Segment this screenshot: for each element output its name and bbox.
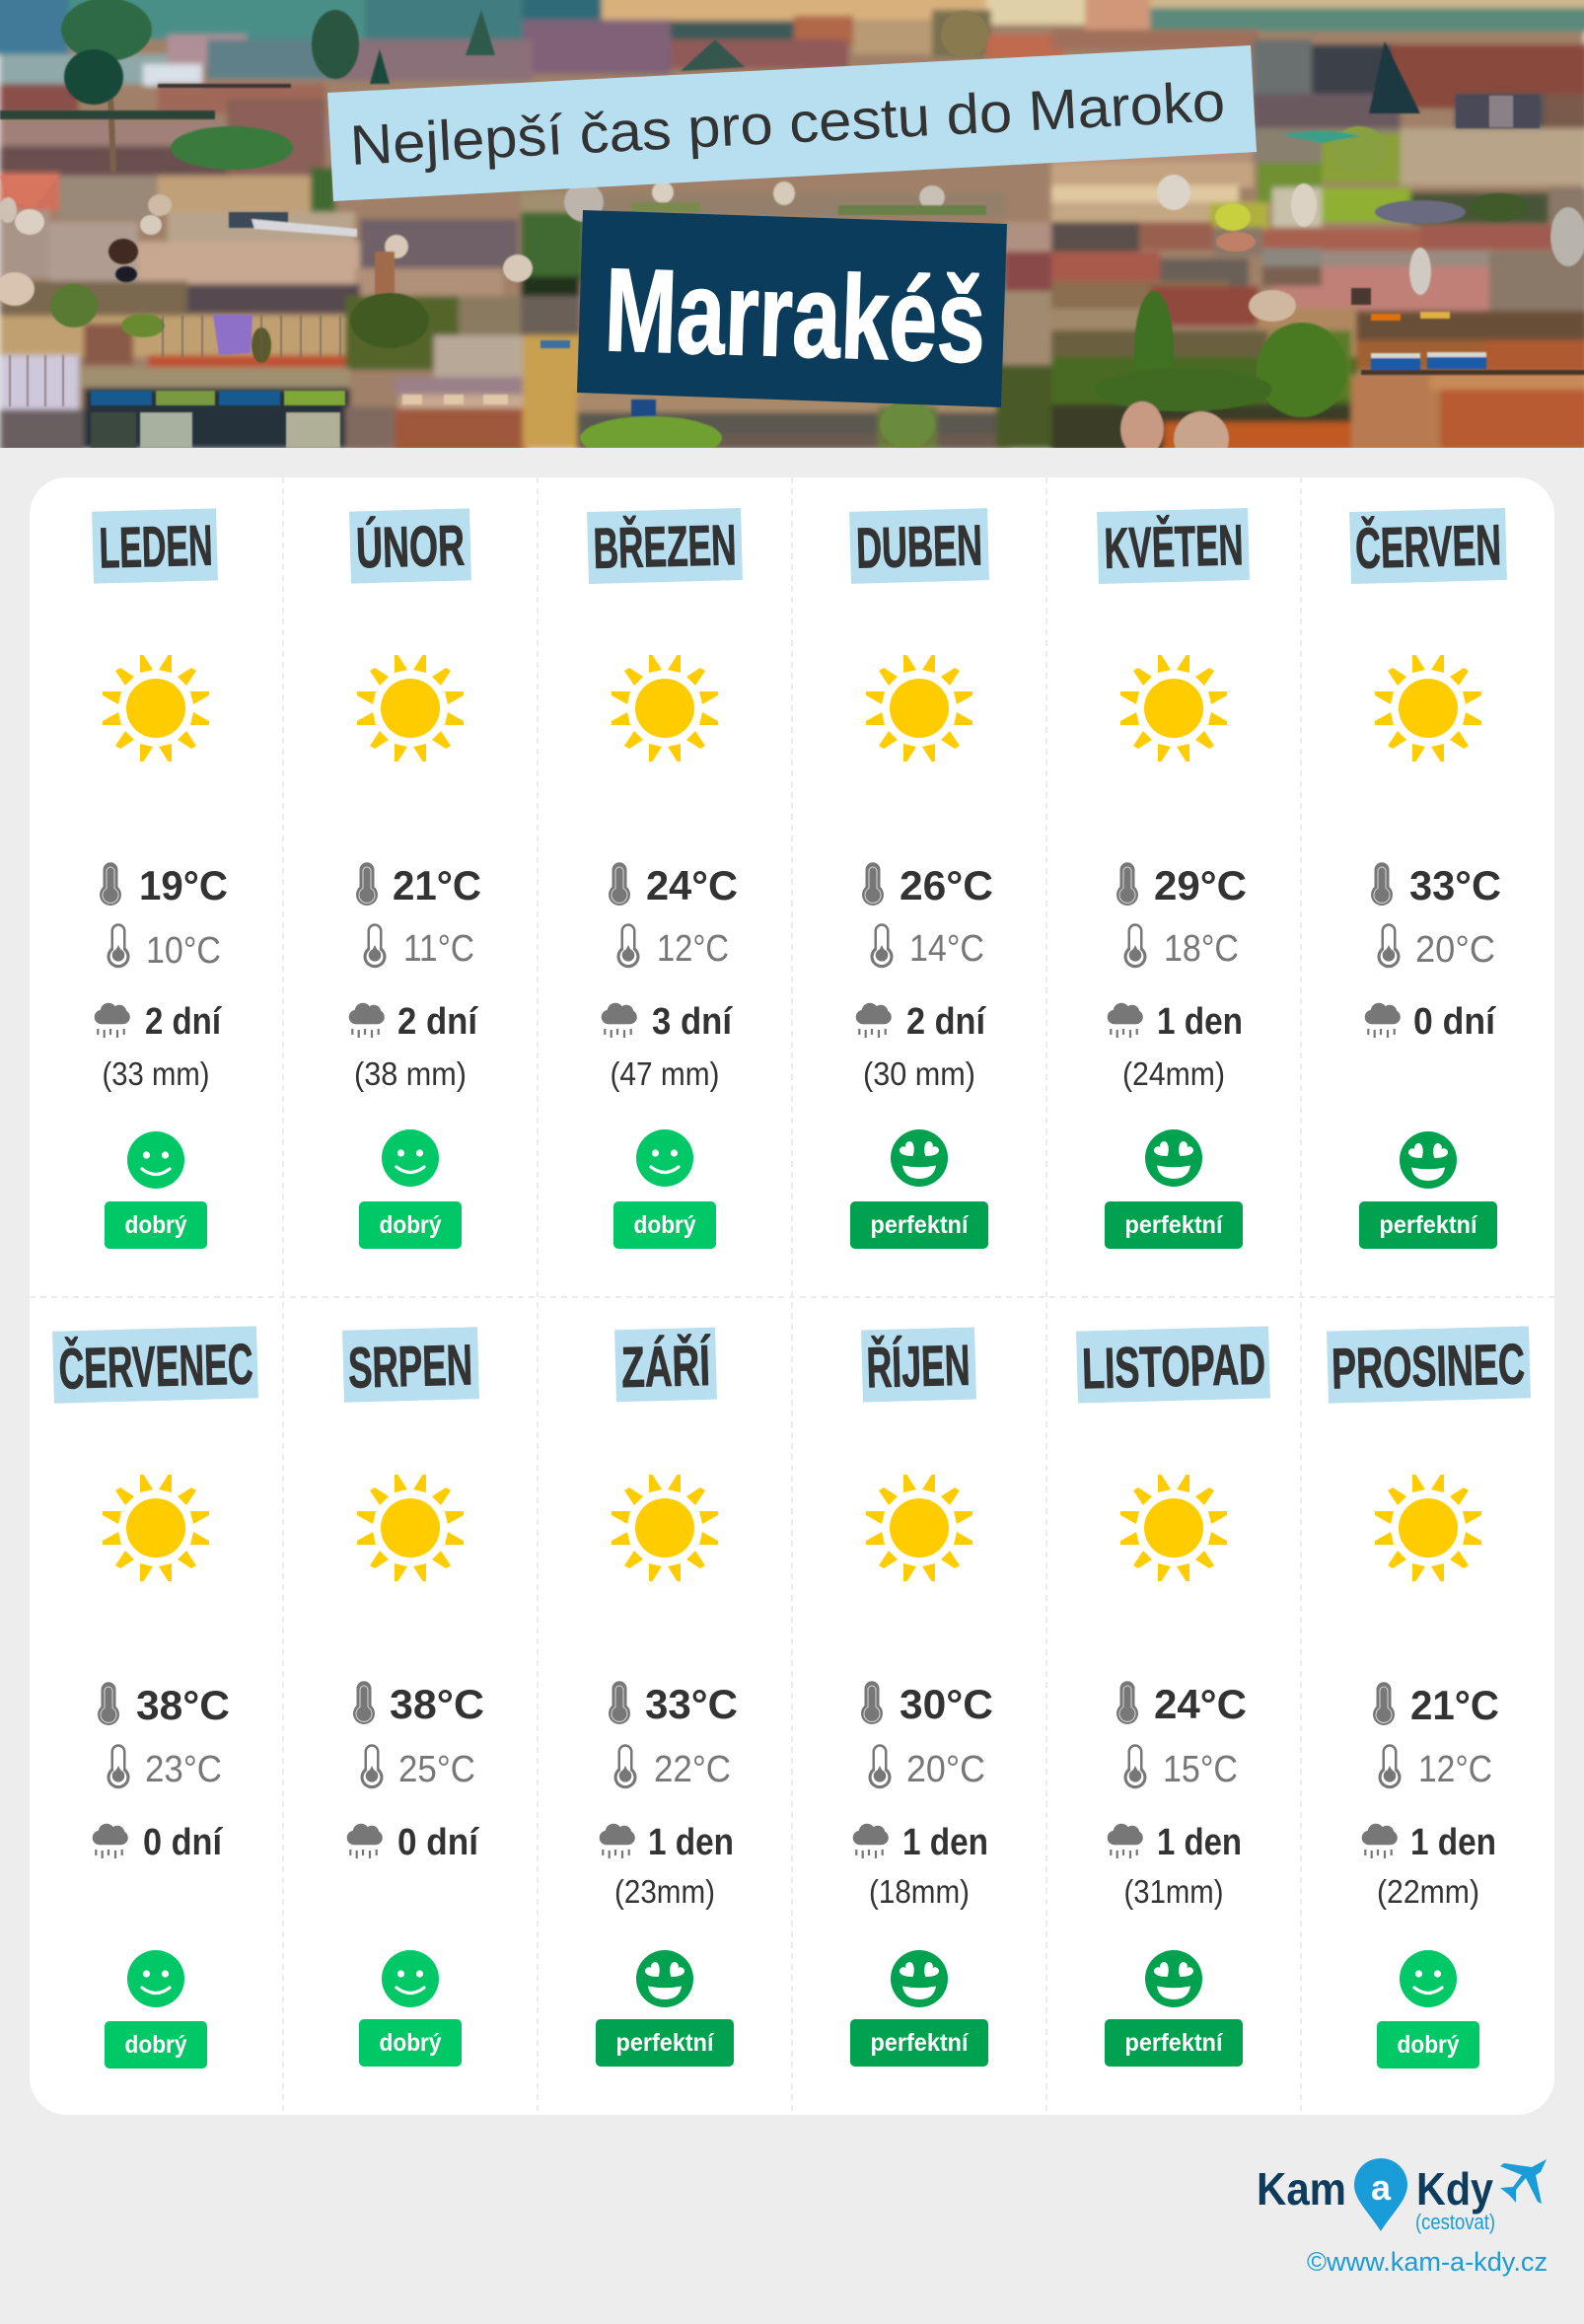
panel: Říjen — [850, 1327, 993, 2067]
rain days: 0 dní — [397, 1822, 479, 1863]
icon: max thermometer — [98, 1682, 119, 1725]
heading: Říjen — [861, 1327, 976, 1402]
panel: Prosinec — [1327, 1326, 1531, 2069]
heading: Březen — [587, 508, 743, 584]
heading: Září: ZÁŘÍ — [620, 1334, 712, 1400]
panel: Březen — [587, 508, 743, 1249]
icon: rain cloud — [95, 1003, 130, 1038]
icon: heart-eyes smiley — [891, 1129, 948, 1187]
max temperature: 19°C — [139, 862, 228, 908]
city heading: Marrakéš: Marrakéš — [603, 244, 987, 388]
icon: max thermometer — [356, 862, 378, 906]
precipitation: (18mm) — [869, 1873, 970, 1910]
icon: sun — [1375, 655, 1481, 762]
heading: Červen — [1349, 508, 1507, 584]
rating badge — [596, 2019, 734, 2067]
icon: smiley — [382, 1129, 439, 1187]
icon: min thermometer — [613, 1744, 637, 1788]
rain days: 1 den — [648, 1822, 734, 1863]
rating badge: dobrý — [379, 2029, 442, 2057]
icon: rain cloud — [600, 1824, 635, 1858]
rating badge — [1359, 1201, 1497, 1249]
precipitation: (31mm) — [1124, 1873, 1223, 1910]
logo: Kam a Kdy: Kam — [1257, 2163, 1346, 2215]
rain days: 1 den — [902, 1822, 988, 1863]
icon: min thermometer — [361, 1744, 383, 1788]
icon: min thermometer — [617, 923, 639, 968]
panel: Květen — [1097, 508, 1250, 1249]
city heading: Marrakéš — [577, 210, 1007, 407]
logo: Kam a Kdy: Kdy — [1416, 2163, 1493, 2215]
max temperature: 24°C — [1154, 1681, 1247, 1727]
website url: ©www.kam-a-kdy.cz — [1307, 2247, 1548, 2277]
icon: rain cloud — [1108, 1824, 1143, 1858]
icon: sun — [612, 1475, 718, 1581]
rating badge — [613, 1201, 716, 1249]
heading: Duben: DUBEN — [855, 513, 983, 581]
icon: min thermometer — [868, 1744, 892, 1788]
icon: rain cloud — [602, 1003, 637, 1038]
min temperature: 18°C — [1164, 928, 1239, 970]
title banner — [327, 45, 1257, 201]
icon: location pin: a — [1371, 2167, 1392, 2208]
icon: sun — [357, 655, 464, 762]
icon: sun — [103, 655, 209, 762]
rain days: 3 dní — [652, 1001, 733, 1043]
heading: Srpen: SRPEN — [347, 1333, 473, 1401]
min temperature: 12°C — [657, 928, 729, 970]
icon: heart-eyes smiley — [1400, 1131, 1457, 1189]
icon: heart-eyes smiley — [1145, 1950, 1202, 2007]
icon: sun — [1120, 1475, 1227, 1581]
min temperature: 20°C — [906, 1749, 985, 1790]
icon: rain cloud — [1108, 1003, 1143, 1038]
rain days: 2 dní — [906, 1001, 986, 1043]
hero photo: Marrakech rooftops — [0, 0, 1584, 467]
precipitation: (38 mm) — [354, 1055, 467, 1092]
panel: Listopad — [1076, 1326, 1270, 2067]
rating badge: dobrý — [379, 1211, 442, 1239]
precipitation: (23mm) — [614, 1873, 715, 1910]
max temperature: 21°C — [393, 862, 481, 908]
panel: Červenec — [52, 1326, 258, 2069]
icon: location pin — [1354, 2158, 1407, 2231]
max temperature: 30°C — [900, 1681, 993, 1727]
icon: max thermometer — [1116, 862, 1138, 906]
rain days: 2 dní — [397, 1001, 478, 1043]
heading: Březen: BŘEZEN — [593, 513, 737, 581]
max temperature: 38°C — [136, 1682, 230, 1728]
icon: heart-eyes smiley — [891, 1950, 948, 2007]
icon: max thermometer — [1116, 1681, 1138, 1724]
heading: Leden: LEDEN — [99, 514, 213, 580]
max temperature: 21°C — [1410, 1682, 1499, 1728]
max temperature: 26°C — [900, 862, 993, 908]
icon: max thermometer — [609, 862, 630, 906]
heading: Říjen: ŘÍJEN — [866, 1334, 971, 1400]
icon: max thermometer — [609, 1681, 630, 1724]
icon: rain cloud — [1365, 1003, 1401, 1038]
rating badge — [1105, 1201, 1243, 1249]
heading: Duben — [849, 508, 989, 584]
min temperature: 25°C — [398, 1749, 475, 1790]
rain days: 1 den — [1157, 1001, 1243, 1043]
min temperature: 20°C — [1415, 929, 1495, 971]
icon: max thermometer — [861, 1681, 883, 1724]
max temperature: 38°C — [390, 1681, 484, 1727]
icon: sun — [866, 1475, 972, 1581]
rating badge: dobrý — [633, 1211, 696, 1239]
rain days: 0 dní — [1413, 1001, 1496, 1043]
rating badge — [850, 1201, 988, 1249]
icon: min thermometer — [107, 923, 130, 968]
rating badge: perfektní — [1124, 1211, 1223, 1239]
precipitation: (22mm) — [1377, 1873, 1479, 1910]
rating badge — [105, 2021, 207, 2069]
min temperature: 15°C — [1163, 1749, 1238, 1790]
icon: sun — [103, 1475, 209, 1581]
precipitation: (24mm) — [1122, 1055, 1225, 1092]
heading: Září — [614, 1328, 717, 1402]
rating badge — [850, 2019, 988, 2067]
icon: min thermometer — [107, 1744, 130, 1788]
icon: heart-eyes smiley — [1145, 1129, 1202, 1187]
icon: smiley — [382, 1950, 439, 2007]
rating badge — [359, 2019, 462, 2067]
rating badge — [105, 1201, 207, 1249]
heading: Červenec — [52, 1326, 258, 1404]
icon: min thermometer — [1124, 1744, 1146, 1788]
heading: Srpen — [342, 1327, 479, 1403]
min temperature: 23°C — [145, 1749, 222, 1790]
panel: Leden — [92, 508, 228, 1249]
rating badge: dobrý — [124, 2031, 187, 2059]
max temperature: 33°C — [1409, 862, 1501, 908]
heading: Únor — [349, 508, 471, 584]
heading: Únor: ÚNOR — [355, 514, 466, 580]
max temperature: 33°C — [645, 1681, 738, 1727]
icon: min thermometer — [1124, 923, 1146, 968]
rain days: 2 dní — [145, 1001, 222, 1043]
panel: Únor — [349, 508, 481, 1249]
icon: rain cloud — [1362, 1824, 1398, 1858]
icon: smiley — [636, 1129, 693, 1187]
logo: Kam a Kdy: (cestovat) — [1415, 2210, 1495, 2234]
icon: max thermometer — [1371, 862, 1393, 906]
panel: Duben — [849, 508, 993, 1249]
icon: airplane — [1500, 2159, 1547, 2204]
panel: Červen — [1349, 508, 1507, 1249]
rating badge: perfektní — [615, 2029, 714, 2057]
heading: Listopad: LISTOPAD — [1081, 1333, 1266, 1401]
min temperature: 10°C — [146, 930, 221, 972]
icon: max thermometer — [353, 1681, 375, 1724]
min temperature: 22°C — [654, 1749, 731, 1790]
precipitation: (30 mm) — [863, 1055, 975, 1092]
rating badge — [1105, 2019, 1243, 2067]
precipitation: (33 mm) — [103, 1055, 209, 1092]
rain days: 1 den — [1410, 1822, 1496, 1863]
heading: Květen: KVĚTEN — [1104, 513, 1244, 581]
icon: min thermometer — [1377, 923, 1401, 968]
title banner: Nejlepší čas pro cestu do Maroko — [348, 70, 1227, 178]
icon: sun — [1375, 1475, 1481, 1581]
icon: sun — [866, 655, 972, 762]
icon: max thermometer — [100, 862, 121, 906]
icon: rain cloud — [93, 1824, 128, 1858]
panel: Září — [596, 1328, 738, 2067]
rating badge: dobrý — [124, 1211, 187, 1239]
icon: max thermometer — [1373, 1682, 1395, 1725]
palm — [108, 39, 113, 173]
logo: Kam a Kdy — [1257, 2158, 1547, 2234]
icon: smiley — [1400, 1950, 1457, 2007]
icon: rain cloud — [853, 1824, 889, 1858]
icon: min thermometer — [870, 923, 894, 968]
rating badge: perfektní — [870, 2029, 969, 2057]
max temperature: 29°C — [1154, 862, 1247, 908]
icon: sun — [612, 655, 718, 762]
rating badge: perfektní — [870, 1211, 969, 1239]
icon: smiley — [127, 1131, 184, 1189]
icon: min thermometer — [1379, 1744, 1401, 1788]
rating badge: dobrý — [1397, 2031, 1460, 2059]
rating badge — [1377, 2021, 1479, 2069]
icon: max thermometer — [862, 862, 884, 906]
min temperature: 14°C — [909, 928, 984, 970]
precipitation: (47 mm) — [610, 1055, 720, 1092]
heading: Leden — [92, 508, 218, 584]
icon: min thermometer — [363, 923, 387, 968]
heading: Květen — [1097, 508, 1250, 584]
icon: heart-eyes smiley — [636, 1950, 693, 2007]
rating badge — [359, 1201, 462, 1249]
heading: Červenec: ČERVENEC — [58, 1332, 253, 1402]
icon: sun — [1120, 655, 1227, 762]
icon: smiley — [127, 1950, 184, 2007]
panel: calendar card — [30, 477, 1554, 2115]
icon: sun — [357, 1475, 464, 1581]
heading: Listopad — [1076, 1326, 1270, 1404]
rating badge: perfektní — [1124, 2029, 1223, 2057]
rain days: 1 den — [1157, 1822, 1242, 1863]
icon: rain cloud — [856, 1003, 892, 1038]
rating badge: perfektní — [1379, 1211, 1477, 1239]
rain days: 0 dní — [143, 1822, 223, 1863]
icon: rain cloud — [347, 1824, 383, 1858]
min temperature: 12°C — [1418, 1749, 1492, 1790]
min temperature: 11°C — [403, 928, 474, 970]
max temperature: 24°C — [646, 862, 738, 908]
panel: Srpen — [342, 1327, 484, 2067]
icon: rain cloud — [349, 1003, 385, 1038]
